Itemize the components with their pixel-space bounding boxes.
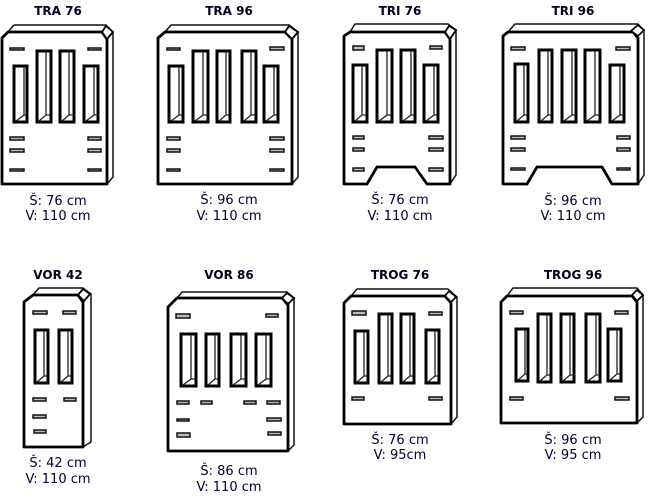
dimensions: TRA 76: Š: 76 cm — [29, 193, 87, 209]
panel: VOR 86 — [168, 268, 294, 495]
dimensions: TRI 76 — [367, 192, 433, 224]
dimensions: VOR 86: V: 110 cm — [196, 480, 262, 495]
dimensions: VOR 42: V: 110 cm — [25, 472, 91, 487]
title: TRA 76: TRA 76 — [34, 4, 82, 18]
title: TRI 96: TRI 96 — [552, 4, 594, 18]
dimensions: TROG 76 — [371, 432, 429, 463]
drawing: TRI 96 element — [503, 24, 644, 184]
dimensions: TROG 96 — [544, 432, 602, 463]
dimensions: TRI 76: V: 110 cm — [367, 209, 433, 224]
dimensions: TRA 96: Š: 96 cm — [200, 192, 258, 208]
title: VOR 86: VOR 86 — [204, 268, 254, 282]
panel: TROG 96 — [501, 268, 643, 463]
drawing: TRA 76 element — [2, 25, 113, 184]
dimensions: VOR 86 — [196, 463, 262, 495]
panel: TRI 76 — [344, 4, 456, 224]
dimensions: TRA 96 — [196, 192, 262, 224]
title: TROG 76: TROG 76 — [371, 268, 429, 282]
dimensions: VOR 42: Š: 42 cm — [29, 455, 87, 471]
dimensions: VOR 86: Š: 86 cm — [200, 463, 258, 479]
title: TRA 96: TRA 96 — [205, 4, 253, 18]
title: TROG 96: TROG 96 — [544, 268, 602, 282]
dimensions: TRA 96: V: 110 cm — [196, 209, 262, 224]
drawing: TRI 76 element — [344, 24, 456, 184]
drawing: VOR 86 element — [168, 292, 294, 451]
title: VOR 42: VOR 42 — [33, 268, 83, 282]
dimensions: TRA 76 — [25, 193, 91, 224]
panel: TRI 96 — [503, 4, 644, 224]
drawing: TROG 96 element — [501, 288, 643, 423]
dimensions: TRA 76: V: 110 cm — [25, 209, 91, 224]
dimensions: TROG 76: Š: 76 cm — [371, 432, 429, 448]
panel: TRA 96 — [158, 4, 298, 224]
dimensions: TRI 76: Š: 76 cm — [371, 192, 429, 208]
drawing: TRA 96 element — [158, 25, 298, 184]
dimensions: TROG 76: V: 95cm — [374, 448, 426, 463]
dimensions: TRI 96: Š: 96 cm — [544, 193, 602, 209]
dimensions: TROG 96: Š: 96 cm — [544, 432, 602, 448]
panel: TRA 76 — [2, 4, 113, 224]
drawing: TROG 76 element — [344, 289, 457, 424]
dimensions: TROG 96: V: 95 cm — [545, 448, 601, 463]
dimensions: TRI 96 — [540, 193, 606, 224]
dimensions: VOR 42 — [25, 455, 91, 487]
dimensions: TRI 96: V: 110 cm — [540, 209, 606, 224]
drawing: VOR 42 element — [24, 288, 91, 447]
panel: TROG 76 — [344, 268, 457, 463]
panel: VOR 42 — [24, 268, 91, 487]
title: TRI 76: TRI 76 — [379, 4, 421, 18]
